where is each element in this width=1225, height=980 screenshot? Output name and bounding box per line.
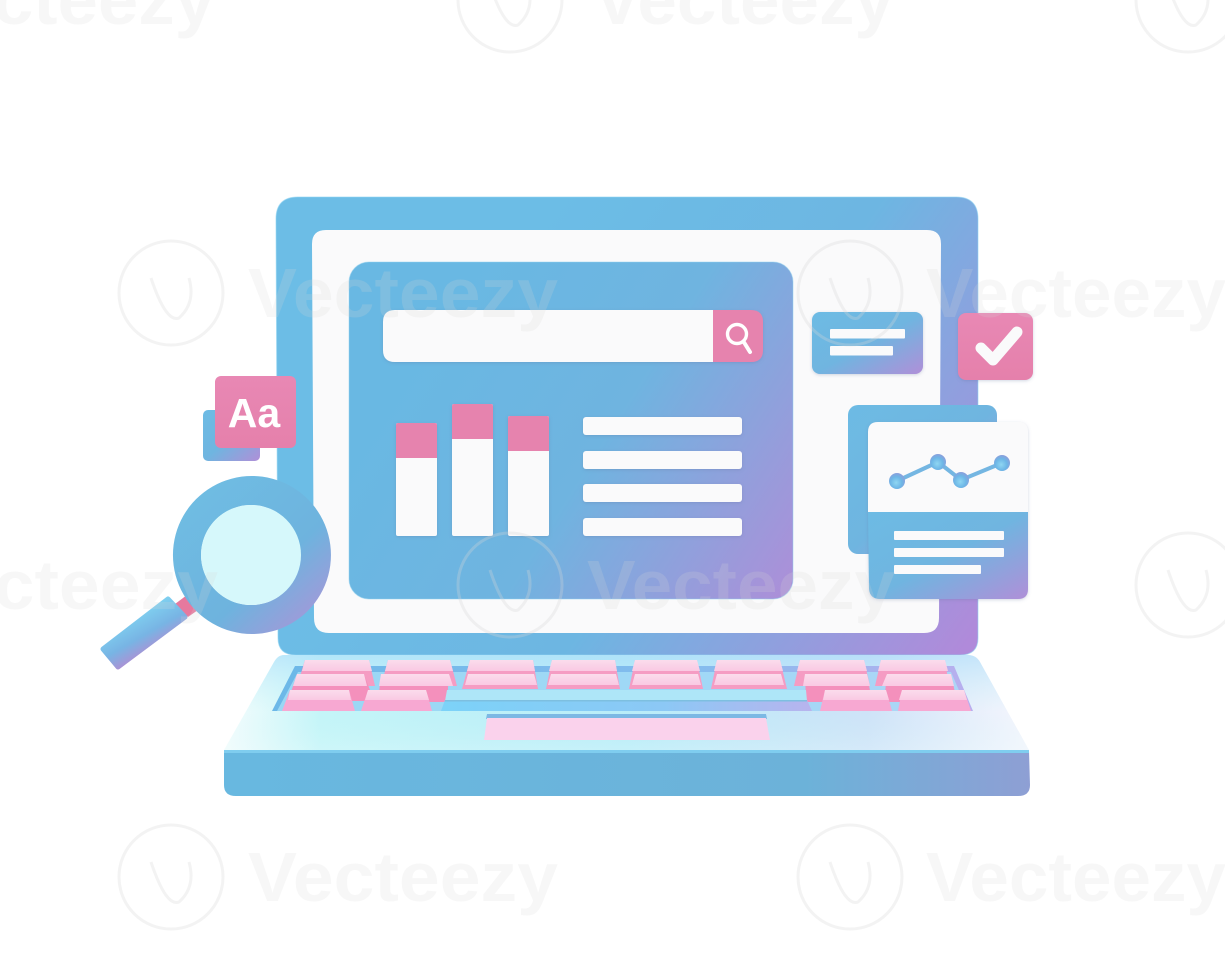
lens — [201, 505, 301, 605]
line chart card — [848, 405, 1028, 599]
trackpad — [484, 714, 770, 740]
watermark row 3 — [0, 533, 1225, 637]
keys row 1 — [297, 660, 949, 689]
front sheet — [868, 422, 1028, 599]
deck — [224, 655, 1029, 750]
bar chart — [396, 404, 549, 536]
search button — [713, 310, 763, 362]
screen — [312, 230, 941, 633]
handle — [103, 595, 198, 667]
laptop base — [224, 655, 1030, 796]
keyboard well — [272, 666, 973, 711]
font badge — [203, 376, 296, 461]
ring — [173, 476, 331, 634]
caption lines — [894, 531, 1004, 574]
watermark row 2: Vecteezy — [248, 254, 558, 332]
space bar — [441, 690, 812, 711]
label: Aa: Aa — [228, 390, 281, 436]
watermark row 4: Vecteezy — [926, 838, 1225, 916]
small text card — [812, 312, 923, 374]
result list — [583, 417, 742, 536]
checkmark badge — [958, 313, 1033, 380]
search bar — [383, 310, 763, 362]
watermark row 2: Vecteezy — [926, 254, 1225, 332]
magnifying glass — [103, 476, 331, 667]
back sheet — [848, 405, 997, 554]
keys row 3 — [282, 690, 971, 711]
watermark row 4 — [119, 825, 1225, 929]
keys row 2 — [288, 674, 957, 702]
search panel — [349, 262, 793, 599]
front edge — [224, 751, 1030, 796]
watermark row 4: Vecteezy — [248, 838, 558, 916]
line chart — [889, 454, 1010, 489]
watermark row 3: Vecteezy — [587, 546, 895, 624]
watermark row 1 — [0, 0, 1225, 52]
laptop lid — [276, 197, 978, 655]
watermark row 2 — [119, 241, 1225, 345]
